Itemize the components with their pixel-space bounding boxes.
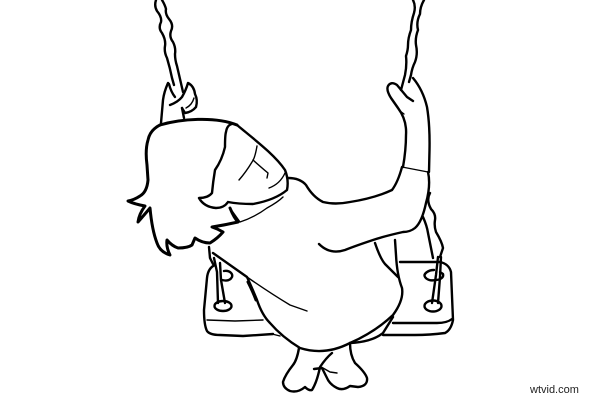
left hand [161, 83, 197, 123]
left rope [155, 0, 183, 92]
hair and head [128, 119, 288, 255]
right rope lower [423, 193, 443, 258]
feet [283, 343, 367, 392]
face details [230, 146, 285, 222]
body [209, 240, 402, 351]
watermark: wtvid.com [529, 384, 579, 396]
right arm and hand [387, 78, 430, 172]
seat holes and ropes [214, 257, 443, 312]
neck and shoulder [288, 167, 402, 204]
swing seat [204, 262, 453, 336]
sleeve [319, 172, 429, 252]
right rope upper [401, 0, 424, 90]
